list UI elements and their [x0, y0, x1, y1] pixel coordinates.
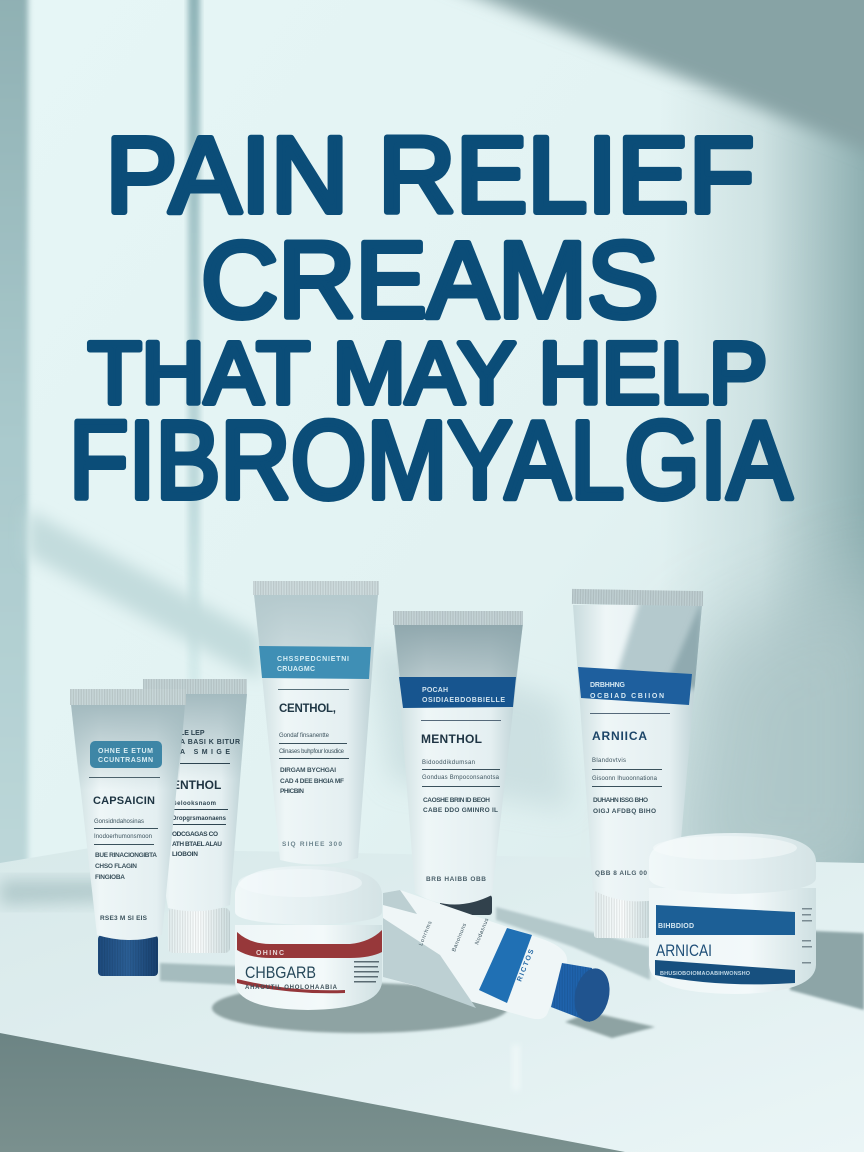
tube: lying on table	[383, 890, 614, 1025]
tube: capsaicin, front left: Gonsidndahosinas	[94, 819, 144, 825]
jar: arnicai, blue label: BHUSIOBOIOMAOABIHWONSHO	[660, 971, 751, 977]
tube: centhol, rear centre: Clinases buhpfour lousdice	[279, 749, 345, 755]
tube: capsaicin, front left: CAPSAICIN	[93, 795, 155, 807]
tube: arnica, right	[572, 589, 710, 938]
tube: capsaicin, front left: Inodoerhumonsmoon	[94, 834, 152, 840]
title line: Creams: CREAMS	[201, 220, 658, 340]
tube: menthol, centre: Bidooddikdumsan	[422, 760, 475, 766]
tube: centhol, rear centre: DIRGAM BYCHGAI	[280, 767, 336, 774]
tube: capsaicin, front left: RSE3 M SI EIS	[100, 915, 148, 922]
tube: capsaicin, front left: FINGIOBA	[95, 874, 125, 881]
tube: menthol, centre: BRB HAIBB OBB	[426, 876, 486, 883]
tube: centhol, rear centre: SIQ RIHEE 300	[282, 841, 342, 848]
tube: menthol, centre: CAOSHE BRIN ID BEOH	[423, 797, 490, 804]
tube: capsaicin, front left: OHNE E ETUM	[98, 748, 153, 755]
tube: centhol, rear centre: CHSSPEDCNIETNI	[277, 656, 349, 663]
jar: arnicai, blue label: BIHBDIOD	[658, 923, 694, 930]
jar: arnicai, blue label	[649, 833, 816, 994]
tube: menthol, rear left	[143, 679, 247, 953]
tube: menthol, rear left: Gelooksnaom	[172, 801, 216, 807]
tube: menthol, centre: CABE DDO GMINRO IL	[423, 807, 498, 814]
tube: centhol, rear centre	[253, 581, 379, 865]
tube: menthol, rear left: Dropgrsmaonaens	[172, 816, 227, 822]
tube: menthol, rear left: ATH BTAEL ALAU	[172, 841, 222, 848]
tube: arnica, right: DRBHHNG	[590, 682, 626, 689]
tube: menthol, rear left: A BASI K BITUR	[180, 739, 240, 746]
tube: menthol, rear left: A SMIGE	[180, 749, 230, 756]
tube: lying on table: Banoinuns	[451, 922, 468, 953]
tube: arnica, right: OIGJ AFDBQ BIHO	[593, 808, 656, 815]
tube: menthol, centre: MENTHOL	[421, 732, 482, 746]
tube: arnica, right: Gisoonn lhuoonnationa	[592, 776, 658, 782]
title line: Pain Relief: PAIN RELIEF	[106, 114, 754, 235]
tube: menthol, centre: POCAH	[422, 687, 448, 694]
tube: menthol, rear left: ODCGAGAS CO	[172, 831, 218, 838]
tube: arnica, right: QBB 8 AILG 00	[595, 870, 647, 877]
tube: capsaicin, front left: CCUNTRASMN	[98, 757, 153, 764]
tube: lying on table: Nodasnus	[474, 917, 490, 946]
tube: centhol, rear centre: CAD 4 DEE BHGIA MF	[280, 778, 344, 785]
tube: lying on table: RICTOS	[516, 948, 536, 983]
tube: centhol, rear centre: CENTHOL,	[279, 703, 336, 715]
tube: menthol, centre	[393, 611, 523, 915]
tube: menthol, rear left: LIOBOIN	[172, 851, 198, 858]
tube: menthol, rear left: ENTHOL	[172, 778, 221, 792]
tube: menthol, centre: OSIDIAEBDOBBIELLE	[422, 697, 505, 704]
tube: arnica, right: DUHAHN ISSG BHO	[593, 797, 648, 804]
title	[69, 114, 793, 522]
tube: lying on table: Lonrhms	[418, 920, 434, 947]
title line: That may help: THAT MAY HELP	[88, 325, 767, 422]
tube: arnica, right: Blandovtvis	[592, 758, 626, 764]
tube: arnica, right: ARNIICA	[592, 729, 647, 743]
tube: capsaicin, front left: CHSO FLAGIN	[95, 863, 137, 870]
jar: arnicai, blue label: ARNICAI	[656, 941, 712, 960]
tube: menthol, rear left: LE LEP	[180, 730, 205, 737]
jar: chbgarb, red label: OHINC	[256, 950, 284, 957]
tube: capsaicin, front left	[70, 689, 186, 976]
tube: centhol, rear centre: PHICBIN	[280, 788, 304, 795]
title line: Fibromyalgia: FIBROMYALGIA	[69, 400, 793, 522]
jar: chbgarb, red label: AHAOUTIL OHOLOHAABIA	[245, 985, 338, 991]
table surface	[0, 848, 864, 1152]
jar: chbgarb, red label	[235, 866, 382, 1010]
tube: centhol, rear centre: Gondaf finsanentte	[279, 733, 330, 739]
jar: chbgarb, red label: CHBGARB	[245, 963, 316, 982]
tube: arnica, right: OCBIAD CBIION	[590, 693, 664, 700]
tube: menthol, centre: Gonduas Bmpoconsanotsa	[422, 775, 500, 781]
tube: capsaicin, front left: BUE RINACIONGIBTA	[95, 852, 157, 859]
tube: centhol, rear centre: CRUAGMC	[277, 666, 315, 673]
